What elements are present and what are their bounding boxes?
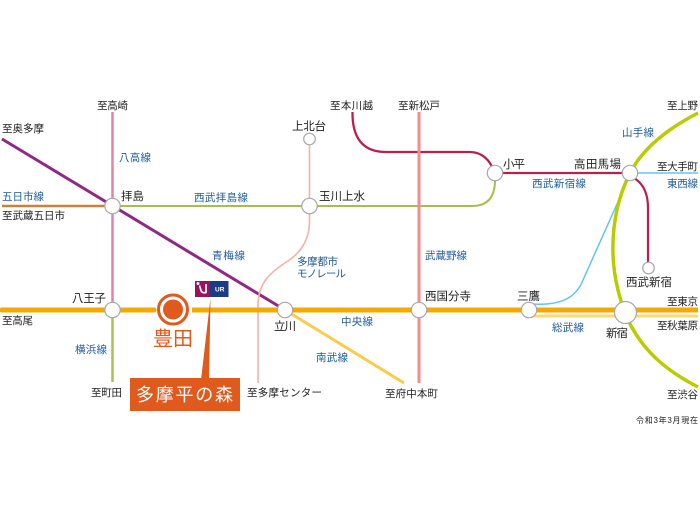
label: Kodaira: 小平 <box>503 158 525 171</box>
label: Hachioji: 八王子 <box>72 292 106 305</box>
station: Takadanobaba <box>622 165 638 181</box>
line: Yamanote <box>613 113 698 387</box>
label: Seibu Shinjuku Line: 西武新宿線 <box>532 177 586 190</box>
station: Haijima <box>105 198 120 214</box>
label: Mitaka: 三鷹 <box>517 290 540 303</box>
label: to Musashi-Itsukaichi: 至武蔵五日市 <box>2 209 65 222</box>
label: Tama Toshi Monorail: 多摩都市 <box>297 255 338 268</box>
line: Chuo east <box>192 308 698 312</box>
label: Nishi-Kokubunji: 西国分寺 <box>425 290 471 303</box>
label: to Shibuya: 至渋谷 <box>667 388 698 401</box>
callout: Tamadaira no Mori: 多摩平の森 <box>136 385 233 405</box>
line: Musashino <box>418 112 420 383</box>
line: Tozai <box>630 172 698 174</box>
label: Toyoda: 豊田 <box>153 328 193 350</box>
label: Musashino Line: 武蔵野線 <box>425 249 468 262</box>
label: Kamikitadai: 上北台 <box>292 119 326 133</box>
line: Mitaka to Takadanobaba <box>532 175 630 304</box>
label: Tama Toshi Monorail <box>297 255 346 280</box>
label: to Shin-Matsudo: 至新松戸 <box>398 99 440 112</box>
line: Seibu Shinjuku branch <box>632 177 648 262</box>
label: Shinjuku: 新宿 <box>606 326 628 340</box>
label: Tama Toshi Monorail: モノレール <box>297 268 346 280</box>
label: Sobu Line: 総武線 <box>552 321 584 334</box>
label: to Ueno: 至上野 <box>667 100 698 112</box>
label: to Fuchu-Hommachi: 至府中本町 <box>385 387 438 400</box>
line: Ome <box>2 139 285 310</box>
station: Tamagawajosui <box>302 198 317 214</box>
line: Yokohama <box>111 310 114 382</box>
label: Haijima: 拝島 <box>121 189 144 203</box>
line: Tama Monorail <box>258 139 310 383</box>
label: Yamanote Line: 山手線 <box>622 126 654 139</box>
line: Nambu <box>285 310 404 383</box>
line: Sobu <box>529 314 698 318</box>
label: Tozai Line: 東西線 <box>667 177 698 190</box>
line: Chuo west <box>2 308 154 312</box>
station: Kamikitadai <box>304 133 315 145</box>
label: Nambu Line: 南武線 <box>316 351 348 364</box>
station: Seibu-Shinjuku <box>643 262 654 274</box>
station: Nishi-Kokubunji <box>411 302 427 318</box>
label: Chuo Line: 中央線 <box>341 315 374 328</box>
label: to Akihabara: 至秋葉原 <box>657 319 698 332</box>
label: to Takasaki: 至高崎 <box>97 99 128 112</box>
line: Hachiko north <box>111 112 114 310</box>
label: Tamagawajosui: 玉川上水 <box>319 190 366 203</box>
icon: UR logo: UR <box>215 286 225 294</box>
station: Shinjuku <box>614 302 636 324</box>
label: Seibu-Shinjuku: 西武新宿 <box>626 275 672 289</box>
note: as of March 2021: 令和3年3月現在 <box>636 415 698 425</box>
label: Takadanobaba: 高田馬場 <box>574 158 622 171</box>
label: to Machida: 至町田 <box>91 387 122 399</box>
label: Tachikawa: 立川 <box>274 319 296 333</box>
label: Hachiko Line: 八高線 <box>119 151 152 164</box>
line: Seibu Haijima <box>112 180 495 206</box>
label: Yokohama Line: 横浜線 <box>75 343 108 356</box>
label: to Takao: 至高尾 <box>2 314 33 327</box>
label: to Otemachi: 至大手町 <box>657 160 698 173</box>
station: Toyoda marker <box>158 295 188 324</box>
line: Itsukaichi <box>2 205 112 207</box>
callout: Tamadaira no Mori <box>130 298 240 411</box>
label: to Hon-Kawagoe: 至本川越 <box>330 99 374 112</box>
label: Ome Line: 青梅線 <box>212 249 246 262</box>
label: to Tokyo: 至東京 <box>667 295 698 308</box>
station: Tachikawa <box>277 302 293 318</box>
label: Seibu Haijima Line: 西武拝島線 <box>194 191 248 204</box>
label: to Tama Center: 至多摩センター <box>247 386 322 399</box>
icon: UR logo <box>195 281 228 297</box>
station: Hachioji <box>105 302 120 318</box>
station: Mitaka <box>521 302 537 318</box>
station: Kodaira <box>487 165 503 181</box>
label: to Okutama: 至奥多摩 <box>2 122 44 135</box>
line: Seibu Shinjuku <box>352 112 630 173</box>
label: Itsukaichi Line: 五日市線 <box>2 190 44 203</box>
